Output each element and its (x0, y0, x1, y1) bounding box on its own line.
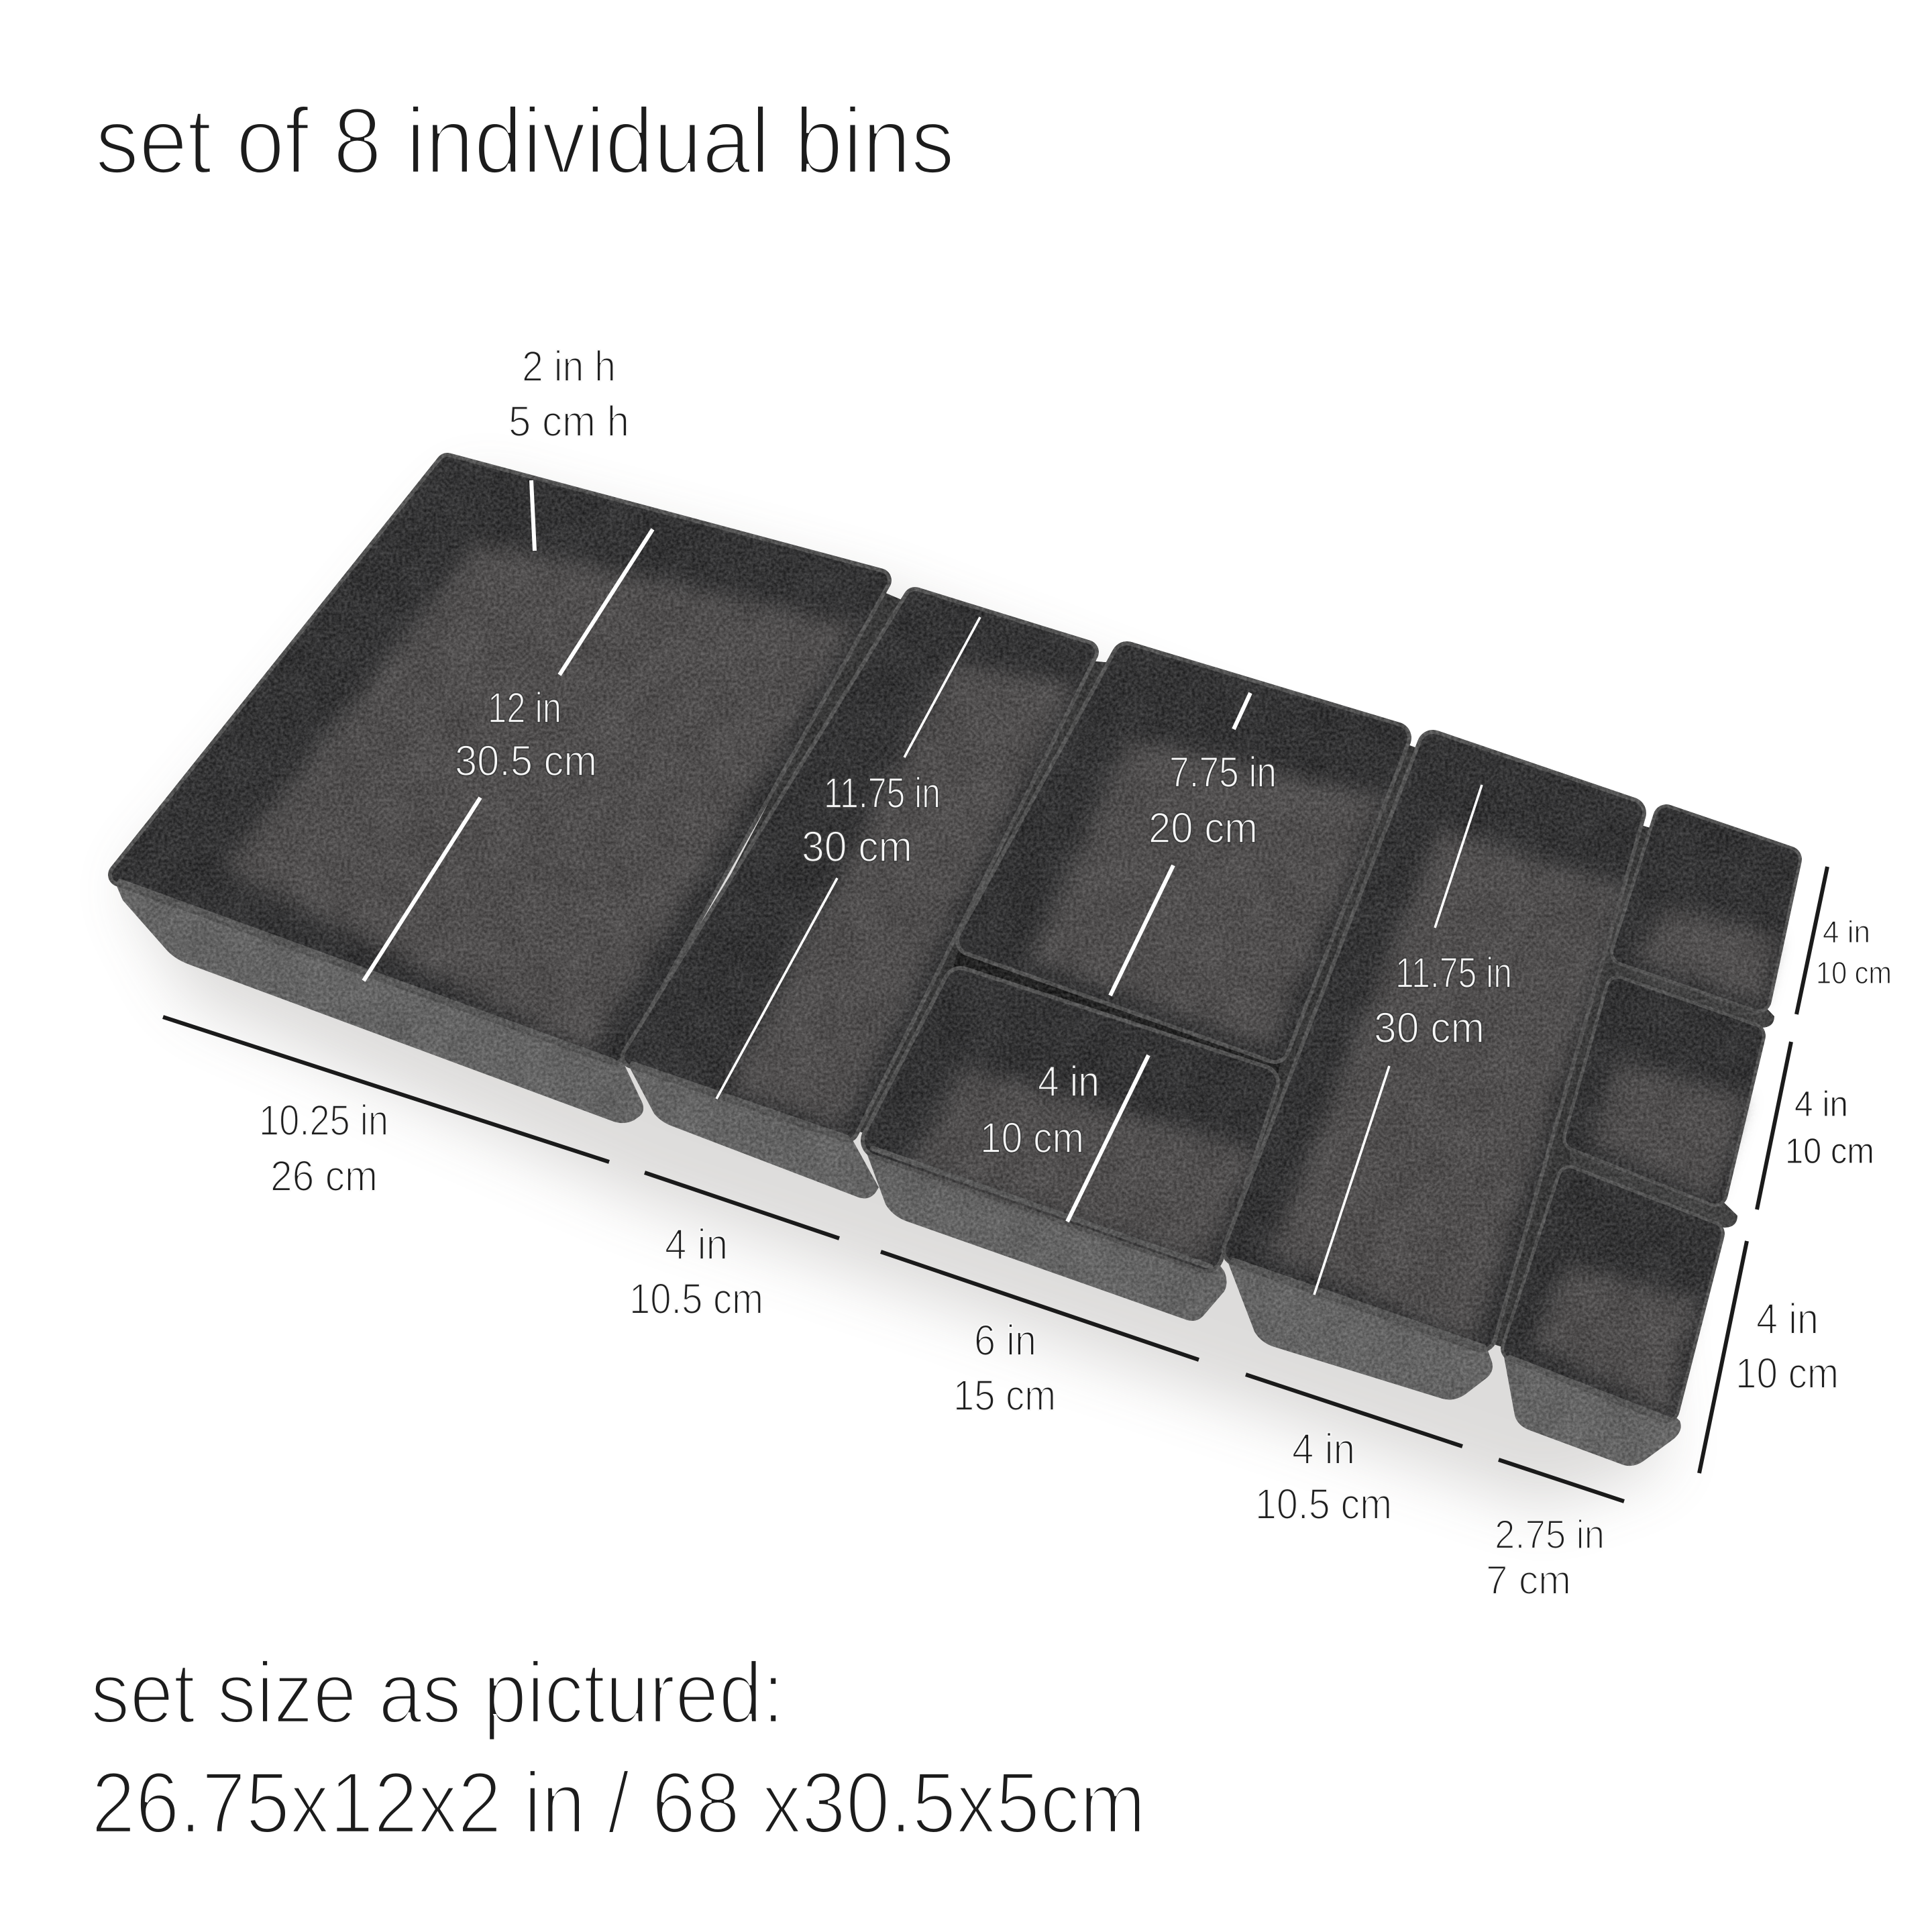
label: width 6 in: 15 cm (953, 1371, 1056, 1419)
label: small bin top (1816, 914, 1892, 990)
felt bins (111, 465, 1788, 1466)
label: small bin middle: 10 cm (1785, 1131, 1874, 1171)
label: medium tray depth: 7.75 in (1169, 748, 1277, 796)
label: small bin top: 10 cm (1816, 955, 1892, 990)
label: width 2.75 in (1486, 1512, 1605, 1603)
label: small bin bottom: 4 in (1756, 1295, 1819, 1343)
label: medium tray depth (1148, 748, 1277, 852)
label: right narrow tray depth: 11.75 in (1395, 949, 1512, 997)
black measurement lines outside bins (163, 867, 1827, 1501)
label: small bin bottom (1735, 1295, 1839, 1397)
label: width 10.25 in (259, 1096, 388, 1200)
set size text (91, 1644, 1146, 1851)
label: small bin top: 4 in (1823, 914, 1870, 949)
label: width second 4 in (1255, 1425, 1392, 1528)
label: large tray depth: 30.5 cm (455, 737, 597, 785)
label: bin height (508, 342, 629, 445)
set size text: 26.75x12x2 in / 68 x30.5x5cm (91, 1754, 1146, 1851)
floor shadow under bins (127, 483, 1664, 1509)
label: narrow tray depth (802, 769, 941, 871)
bin 7: small square middle (1570, 989, 1752, 1228)
label: large tray depth: 12 in (488, 684, 561, 732)
label: width 2.75 in: 7 cm (1486, 1558, 1571, 1603)
label: width 10.25 in: 10.25 in (259, 1096, 388, 1144)
bin 1: large tray (111, 465, 879, 1123)
label: short tray depth: 4 in (1038, 1057, 1099, 1106)
bin 6: small square top (1615, 818, 1788, 1028)
label: bin height: 2 in h (522, 342, 616, 390)
label: small bin bottom: 10 cm (1735, 1349, 1839, 1397)
label: width 4 in: 4 in (665, 1220, 728, 1269)
label: small bin middle (1785, 1084, 1874, 1171)
label: short tray depth (980, 1057, 1099, 1162)
label: width 4 in: 10.5 cm (629, 1275, 763, 1323)
bin 4: short wide tray (862, 985, 1261, 1321)
label: medium tray depth: 20 cm (1148, 804, 1258, 852)
label: narrow tray depth: 30 cm (802, 822, 912, 871)
label: short tray depth: 10 cm (980, 1114, 1084, 1162)
label: small bin middle: 4 in (1794, 1084, 1848, 1124)
label: width 10.25 in: 26 cm (270, 1152, 378, 1200)
white measurement lines inside bins (364, 480, 1482, 1295)
bin 2: long narrow tray (624, 599, 1087, 1198)
label: width 6 in: 6 in (974, 1316, 1036, 1364)
label: right narrow tray depth: 30 cm (1374, 1004, 1485, 1052)
label: large tray depth (455, 684, 597, 785)
bin 5: long narrow tray right (1225, 746, 1630, 1399)
title: set of 8 individual bins (95, 88, 955, 193)
dark backing between bins (637, 590, 1784, 1402)
label: bin height: 5 cm h (508, 397, 629, 445)
label: narrow tray depth: 11.75 in (824, 769, 941, 817)
bin 8: small square bottom (1503, 1179, 1711, 1466)
label: right narrow tray depth (1374, 949, 1512, 1052)
label: width second 4 in: 10.5 cm (1255, 1480, 1392, 1528)
label: width 2.75 in: 2.75 in (1495, 1512, 1605, 1557)
label: width 6 in (953, 1316, 1056, 1419)
bin 3: medium tray (956, 657, 1395, 1090)
set size text: set size as pictured: (91, 1644, 784, 1741)
label: width 4 in (629, 1220, 763, 1323)
label: width second 4 in: 4 in (1292, 1425, 1355, 1473)
